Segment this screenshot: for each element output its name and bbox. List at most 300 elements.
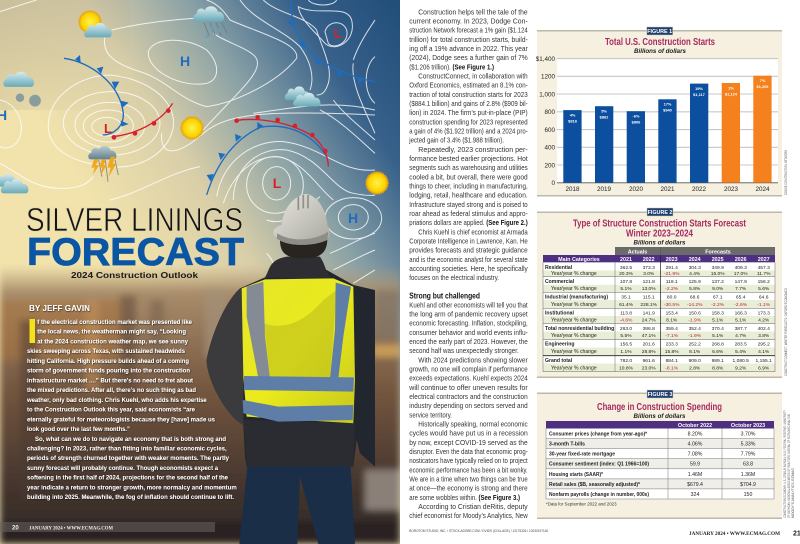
photo credit: BOROTOM STUDIO, INC. / STOCK.ADOBE.COM / DVIDS (COLLAGE) / 12175326 / 12030197140	[409, 529, 548, 533]
table header row: 2023	[666, 257, 678, 263]
row: institutional: 4.2%	[758, 318, 770, 324]
text block: intro article on photo: f the electrical construction market was presented like	[37, 319, 192, 326]
table column group headers: Actuals	[628, 249, 647, 255]
values: 7.08%	[688, 452, 703, 458]
table title: Winter 2023–2024	[626, 229, 693, 240]
row: commercial: 119.1	[666, 279, 678, 285]
values: 1.46M	[688, 472, 702, 478]
figure 2 badge: FIGURE 2	[648, 210, 672, 216]
row: grand total: 23.0%	[642, 366, 656, 372]
row: engineering: 201.6	[643, 342, 655, 348]
row: commercial: 125.9	[689, 279, 701, 285]
row: institutional: -4.6%	[620, 318, 633, 324]
panel: Figure 3 spending table	[537, 390, 782, 519]
row: grand total: 10.8%	[619, 366, 634, 372]
text block: article column	[408, 7, 528, 520]
rows: Housing starts (SAAR)*	[549, 472, 603, 478]
row: grand total: 1,080.5	[733, 358, 749, 364]
text block: article column: Repeatedly, 2023 construction per-	[418, 145, 528, 154]
footer left: JANUARY 2024 • WWW.ECMAG.COM	[29, 526, 113, 532]
table title	[573, 218, 747, 240]
figure 3 badge: FIGURE 3	[648, 392, 672, 398]
rows	[549, 432, 649, 498]
row: engineering: 233.3	[666, 342, 678, 348]
row: commercial: 147.9	[735, 279, 747, 285]
table subtitle: Billions of dollars	[634, 413, 686, 420]
chart subtitle: Billions of dollars	[634, 48, 687, 55]
row: residential: 3.0%	[643, 271, 655, 277]
x axis labels: 2021	[660, 186, 675, 193]
text block: article column: enced the early part of 2023. However, the	[409, 337, 528, 346]
row: institutional: Institutional	[545, 310, 574, 316]
values: 1.36M	[741, 472, 755, 478]
footer band left	[0, 522, 215, 532]
row: engineering: 4.1%	[758, 349, 770, 355]
bar value labels: $940	[663, 108, 672, 112]
table header: October 2023	[731, 423, 765, 429]
figure 1 badge: FIGURE 1	[647, 29, 672, 35]
text block: intro article on photo: storm of government funds pouring into the construction	[27, 368, 190, 375]
row: engineering: 5.4%	[735, 349, 747, 355]
row: institutional: -1.9%	[688, 318, 702, 324]
row: total nonresidential: 3.8%	[758, 333, 770, 339]
bars: actuals	[563, 84, 708, 183]
bar value labels: 4%	[570, 112, 576, 118]
row: industrial: 35.1	[621, 294, 631, 300]
y axis labels: 0	[551, 180, 555, 187]
row: total nonresidential: 386.8	[643, 326, 655, 332]
text block: article column: are some wobbles within. (See Figure 3.)	[409, 493, 520, 502]
worker figure	[207, 194, 375, 544]
row: institutional: 24.7%	[642, 318, 656, 324]
map pressure letters: L	[273, 175, 282, 191]
row: industrial: 80.0	[667, 294, 677, 300]
text block: article column: disruptor. Even the data that economic prog-	[409, 447, 528, 456]
table header row: 2021	[620, 257, 632, 263]
table column group headers	[615, 247, 775, 255]
row: industrial: 68.6	[690, 294, 700, 300]
safety vest	[242, 278, 355, 423]
text block: article column: Kuehl and other economists will tell you that	[409, 300, 528, 309]
text block: intro article on photo: building into 2025. Meanwhile, the fog of inflation should continue to lift.	[27, 494, 234, 501]
row: total nonresidential: 4.7%	[735, 333, 747, 339]
row: engineering: 8.1%	[689, 349, 701, 355]
y axis labels: 800	[544, 109, 555, 116]
rows: 3-month T-bills	[549, 442, 585, 448]
row: institutional: 166.3	[735, 310, 747, 316]
text block: article column: construction spending for 2023 represented	[409, 117, 528, 126]
row: institutional: 5.1%	[735, 318, 747, 324]
text block: article column: second half was unexpectedly stronger.	[409, 346, 519, 355]
row: residential: 17.0%	[734, 271, 748, 277]
city background	[0, 265, 400, 544]
row: residential: 409.3	[735, 265, 747, 271]
row: institutional: 5.1%	[712, 318, 724, 324]
chart title: Total U.S. Construction Starts	[605, 37, 715, 48]
row: residential: 457.3	[758, 265, 770, 271]
values: 63.8	[743, 462, 753, 468]
row: industrial: Year/year % change	[551, 302, 597, 308]
icon: yellow drop cap	[30, 319, 35, 343]
row: residential: 349.9	[712, 265, 724, 271]
y axis labels: 600	[544, 127, 555, 134]
text block: intro article on photo: at the 2024 construction weather map, we see sunny	[37, 338, 188, 346]
text block: article column: formance bested earlier projections. Hot	[409, 154, 528, 163]
row: commercial: 5.1%	[620, 286, 632, 292]
text block: intro article on photo: So, what can we do to navigate an economy that is both strong and	[35, 436, 226, 443]
values	[687, 432, 756, 498]
map pressure letters: L	[334, 26, 342, 41]
row: industrial: 67.1	[713, 294, 723, 300]
bar value labels: 7%	[760, 78, 766, 83]
text block: article column: Strong but challenged	[409, 290, 480, 300]
text block: article column: ($884.1 billion) and gains of 2.8% ($909 bil-	[409, 99, 528, 108]
row: grand total: 884.1	[666, 358, 678, 364]
values: 4.06%	[688, 442, 703, 448]
row: industrial: Industrial (manufacturing)	[545, 294, 608, 300]
row: industrial	[545, 294, 771, 308]
row: institutional: Year/year % change	[551, 318, 597, 324]
row: total nonresidential: -7.1%	[665, 333, 679, 339]
text block: article column: current economy. In 2023, Dodge Con-	[409, 16, 528, 26]
text block: intro article on photo: sunny forecast will probably continue. Though economists expect a	[27, 465, 218, 472]
row: commercial: 107.8	[620, 279, 632, 285]
row: industrial: -2.6%	[734, 302, 748, 308]
footnote: *Data for September 2022 and 2023	[546, 502, 617, 506]
map pressure letters	[0, 26, 358, 226]
text block: intro article on photo: infrastructure market ....” But there’s no need to fret about	[27, 377, 194, 384]
x axis labels	[565, 186, 770, 193]
text block: article column: consumer behavior and world events influ-	[409, 328, 528, 337]
text block: article column: According to Cristian deRitis, deputy	[418, 502, 528, 511]
row: grand total: -8.1%	[665, 366, 679, 372]
source note figure 3: OF MICHIGAN; NATIONAL ASSOCIATION OF REALTORS; BUREAU OF ECONOMIC ANALYSIS	[787, 413, 791, 518]
collar and neck	[265, 257, 333, 280]
text block: article column: exceeds expectations. Kuehl expects 2024	[409, 374, 528, 383]
row: grand total: 9.2%	[735, 366, 747, 372]
row: residential: 20.3%	[619, 271, 634, 277]
vest reflective stripes	[243, 282, 354, 422]
rows: Consumer sentiment (index: Q1 1966=100)	[549, 462, 649, 468]
text block: article column: electrical contractors and the construction	[409, 392, 528, 401]
row: commercial: 7.7%	[735, 286, 747, 292]
text block: article column: focuses on the electrical industry.	[409, 273, 499, 282]
values: 3.70%	[741, 432, 756, 438]
text block: article column: the long arm of pandemic recovery upset	[409, 310, 528, 318]
row: total nonresidential: 359.4	[666, 326, 678, 332]
table header row: Main Categories	[558, 257, 600, 263]
rows: Consumer prices (change from year-ago)*	[549, 432, 647, 438]
source note figure 2: CONSTRUCTCONNECT, WINTER FORECASTS; OXFORD ECONOMICS	[784, 287, 788, 376]
row: engineering: 28.8%	[642, 349, 656, 355]
row: engineering: 295.2	[758, 342, 770, 348]
text block: intro article on photo: look good over the last few months.”	[27, 426, 130, 433]
text block: intro article on photo: the local news, the weatherman might say, “Looking	[37, 329, 186, 336]
bar value labels: 5%	[601, 108, 607, 114]
row: grand total: 2.8%	[689, 366, 701, 372]
table header row	[543, 255, 775, 263]
text block: intro article on photo: softening in the first half of 2024, projections for the second half of the	[27, 475, 228, 482]
row: total nonresidential: 370.4	[712, 326, 724, 332]
row: institutional: 158.3	[712, 310, 724, 316]
hard hat	[273, 194, 330, 245]
weather map contour lines	[0, 0, 382, 283]
row: residential: 373.3	[643, 265, 655, 271]
trousers	[239, 467, 355, 544]
row: engineering: 252.2	[689, 342, 701, 348]
row: grand total: Year/year % change	[551, 366, 597, 372]
title: Forecast: FORECAST	[27, 231, 244, 274]
text block: article column: ConstructConnect, in collaboration with	[418, 72, 528, 80]
bar value labels	[568, 78, 769, 124]
row: industrial: 115.1	[643, 294, 655, 300]
text block: article column: service territory.	[409, 410, 452, 419]
row: commercial: Commercial	[545, 279, 575, 285]
row: industrial: -2.2%	[711, 302, 725, 308]
text block: article column: jected gain of 3.4% ($1.988 trillion).	[408, 136, 504, 145]
row: commercial: 121.8	[643, 279, 655, 285]
row: engineering: 156.5	[620, 342, 632, 348]
y axis labels: 1200	[541, 74, 555, 81]
text block: article column: things to cheer, including in manufacturing,	[409, 182, 528, 190]
x axis labels: 2019	[597, 186, 611, 193]
row: total nonresidential: 5.1%	[712, 333, 724, 339]
row: engineering: 283.5	[735, 342, 747, 348]
row: residential: 291.4	[666, 265, 678, 271]
bar value labels: 1%	[728, 86, 734, 90]
row: residential: 362.5	[620, 265, 632, 271]
text block: intro article on photo	[26, 319, 237, 501]
table header	[546, 421, 774, 429]
text block: article column: growth, no one will complain if performance	[409, 364, 528, 374]
y axis labels: $1,400	[536, 56, 555, 63]
row: grand total: 909.0	[689, 358, 701, 364]
x axis labels: 2023	[724, 186, 738, 193]
row: residential: -21.9%	[664, 271, 680, 277]
x axis labels: 2020	[629, 186, 643, 193]
row: commercial: 5.6%	[758, 286, 770, 292]
table header row: 2022	[643, 257, 655, 263]
row: residential: 15.0%	[711, 271, 725, 277]
row: industrial: 228.1%	[640, 302, 658, 308]
text block: intro article on photo: the mixed predictions. After all, there’s no such thing as bad	[27, 387, 196, 394]
table title: Change in Construction Spending	[597, 402, 722, 413]
row: commercial	[545, 279, 770, 292]
values: 7.79%	[741, 452, 756, 458]
row: institutional: 113.8	[620, 310, 632, 316]
table header row: 2024	[689, 257, 701, 263]
map pressure letters: H	[348, 210, 358, 226]
rows: Retail sales ($B, seasonally adjusted)*	[549, 482, 640, 488]
x axis labels: 2022	[692, 186, 706, 193]
table header row: 2025	[712, 257, 724, 263]
map pressure letters: H	[180, 53, 190, 69]
row: engineering: 268.8	[712, 342, 724, 348]
footer right: JANUARY 2024 • WWW.ECMAG.COM	[689, 531, 780, 537]
values: 324	[691, 492, 699, 498]
text block: intro article on photo: skies sweeping across Texas, with sustained headwinds	[27, 348, 185, 355]
rows: 30-year fixed-rate mortgage	[549, 452, 615, 458]
bars: forecasts	[722, 76, 772, 183]
text block: article column: roar ahead as federal stimulus and appro-	[409, 209, 528, 218]
row: commercial: Year/year % change	[551, 286, 597, 292]
text block: intro article on photo: periods of strength churned together with weaker moments. The partly	[27, 455, 229, 462]
table header row: 2026	[735, 257, 747, 263]
source note figure 3: CONSTRUCTION ECONOMY: U.S. CENSUS BUREAU; BLS; FEDERAL RESERVE; UNIVERSITY	[783, 409, 787, 518]
bar value labels: $806	[632, 120, 641, 124]
row: industrial: -30.5%	[664, 302, 680, 308]
values: 8.20%	[688, 432, 703, 438]
values: $704.9	[740, 482, 756, 488]
row: residential: 11.7%	[757, 271, 771, 277]
text block: article column: cycles would have put us in a recession	[409, 429, 528, 438]
row: residential: Year/year % change	[551, 271, 597, 277]
row: residential	[545, 265, 771, 277]
row: total nonresidential	[545, 326, 770, 339]
row: industrial: -14.2%	[687, 302, 703, 308]
bar value labels: -6%	[633, 114, 640, 118]
row: grand total	[545, 358, 772, 372]
text block: article column: at once—the economy is strong and there	[409, 484, 528, 493]
rows: Nonfarm payrolls (change in number, 000s)	[549, 492, 649, 498]
row: engineering: Engineering	[545, 342, 574, 348]
row: total nonresidential: Year/year % change	[551, 333, 597, 339]
text block: article column: trillion) for total construction starts, build-	[409, 35, 528, 44]
row: institutional: 173.3	[758, 310, 770, 316]
text block: article column: and is the economic analyst for several state	[409, 255, 528, 264]
text block: article column: Oxford Economics, estimated an 8.1% con-	[409, 81, 528, 90]
row: commercial: 13.0%	[642, 286, 656, 292]
bar value labels: $1,117	[693, 92, 705, 97]
row: institutional: 153.4	[666, 310, 678, 316]
text block: article column: lion) in 2024. The firm’s put-in-place (PIP)	[409, 108, 528, 117]
text block: article column: Construction helps tell the tale of the	[418, 7, 528, 16]
panel: Figure 2 forecast table	[537, 208, 782, 378]
row: industrial: 61.4%	[619, 302, 634, 308]
row: total nonresidential: 352.4	[689, 326, 701, 332]
table header row: 2027	[758, 257, 770, 263]
text block: article column: by now, except COVID-19 served as the	[409, 438, 528, 447]
text block: article column: traction of total construction starts for 2023	[409, 90, 528, 99]
row: residential: Residential	[545, 265, 573, 271]
bar value labels: $862	[600, 114, 609, 120]
row: commercial: 137.2	[712, 279, 724, 285]
row: engineering: 15.8%	[665, 349, 679, 355]
panel: Figure 1 bar chart	[536, 27, 782, 196]
text block: article column: Infrastructure stayed strong and is poised to	[409, 200, 528, 209]
text block: intro article on photo: year indicate a return to stronger growth, more normalcy and momentum	[27, 484, 237, 491]
text block: article column: a gain of 4% ($1.922 trillion) and a 2024 pro-	[409, 126, 528, 136]
bar value labels: $1,124	[725, 92, 738, 96]
row: engineering: Year/year % change	[551, 349, 597, 355]
row: institutional: 141.9	[643, 310, 655, 316]
row: grand total: 6.9%	[758, 366, 770, 372]
text block: intro article on photo: to the Construction Outlook this year, said economists “are	[27, 407, 195, 414]
x axis labels: 2024	[755, 186, 770, 193]
text block: article column: We are in a time when two things can be true	[409, 474, 528, 484]
text block: article column: provides forecasts and strategic guidance	[409, 246, 528, 255]
y axis labels	[536, 56, 555, 187]
bar value labels: $818	[568, 118, 578, 124]
row: residential: 304.3	[689, 265, 701, 271]
table header: October 2022	[678, 423, 712, 429]
text block: article column: industry depending on sectors served and	[409, 401, 528, 410]
text block: article column: accounting societies. Here, he specifically	[409, 264, 528, 273]
footer left	[12, 526, 113, 532]
text block: article column: ing off a 19% advance in 2022. This year	[409, 44, 528, 53]
row: total nonresidential: 263.0	[620, 326, 632, 332]
bar value labels: 19%	[695, 86, 703, 91]
row: total nonresidential: 47.1%	[642, 333, 656, 339]
text block: intro article on photo: weather, only bad clothing. Chris Kuehl, who adds his expertise	[26, 397, 207, 404]
text block: article column: lodging, retail, healthcare and education.	[409, 191, 528, 200]
lower jacket	[243, 420, 355, 467]
table body	[543, 247, 775, 372]
text block: intro article on photo: hitting California. High pressure builds ahead of a coming	[27, 358, 189, 365]
left sleeve highlight	[207, 288, 243, 425]
row: total nonresidential: 5.5%	[620, 333, 632, 339]
row: commercial: 9.0%	[712, 286, 724, 292]
text block: article column: Corporate Intelligence in Lawrence, Kan. He	[409, 237, 528, 246]
row: residential: 4.4%	[689, 271, 701, 277]
bar value labels: 17%	[664, 102, 672, 106]
table column group headers: Forecasts	[705, 249, 731, 255]
row: engineering	[545, 342, 770, 355]
subtitle: 2024 Construction Outlook	[71, 271, 199, 280]
text block: article column: chief economist for Moody’s Analytics, New	[409, 511, 528, 520]
weather icons: suns and clouds	[0, 6, 388, 194]
byline: BY JEFF GAVIN	[29, 303, 90, 313]
row: grand total: 1,155.1	[756, 358, 772, 364]
row: commercial: 5.8%	[689, 286, 701, 292]
jacket	[207, 270, 375, 467]
text block: article column: Chris Kuehl is chief economist at Armada	[418, 227, 528, 236]
values: 5.33%	[741, 442, 756, 448]
text block: article column: Historically speaking, normal economic	[418, 420, 528, 428]
x axis labels: 2018	[565, 186, 580, 193]
row: industrial: 64.6	[759, 294, 769, 300]
head	[280, 240, 327, 258]
text block: article column: nosticators have typically relied on to project	[409, 456, 528, 465]
y axis labels: 200	[544, 162, 555, 169]
vest shaded area	[264, 290, 337, 378]
row: institutional: 150.6	[689, 310, 701, 316]
values: 150	[744, 492, 752, 498]
row: industrial: -1.1%	[757, 302, 771, 308]
row: engineering: 1.1%	[620, 349, 632, 355]
row: industrial: 65.4	[736, 294, 746, 300]
values: $679.4	[687, 482, 703, 488]
footer left: 20	[12, 526, 19, 532]
text block: article column: cooled a bit, but overall, there were good	[409, 172, 528, 181]
text block: article column: economic performance has been a bit wonky.	[409, 465, 528, 474]
table subtitle: Billions of dollars	[634, 240, 686, 246]
text block: article column: With 2024 predictions showing slower	[418, 355, 528, 364]
row: institutional	[545, 310, 770, 324]
source note figure 1: DODGE CONSTRUCTION NETWORK	[784, 149, 788, 195]
bar value labels: $1,206	[757, 84, 769, 89]
text block: article column: will continue to offer uneven results for	[408, 383, 528, 392]
row: grand total: 961.6	[643, 358, 655, 364]
row: grand total: 989.1	[712, 358, 724, 364]
text block: article column: ($1.206 trillion). (See Figure 1.)	[409, 62, 494, 71]
table body	[546, 428, 774, 499]
text block: article column: (2024), Dodge sees a further gain of 7%	[409, 53, 528, 62]
map pressure letters: L	[104, 121, 112, 136]
row: engineering: 6.6%	[712, 349, 724, 355]
row: total nonresidential: 387.7	[735, 326, 747, 332]
text block: intro article on photo: challenging? In 2023, rather than fitting into familiar economic cycles,	[27, 446, 227, 452]
